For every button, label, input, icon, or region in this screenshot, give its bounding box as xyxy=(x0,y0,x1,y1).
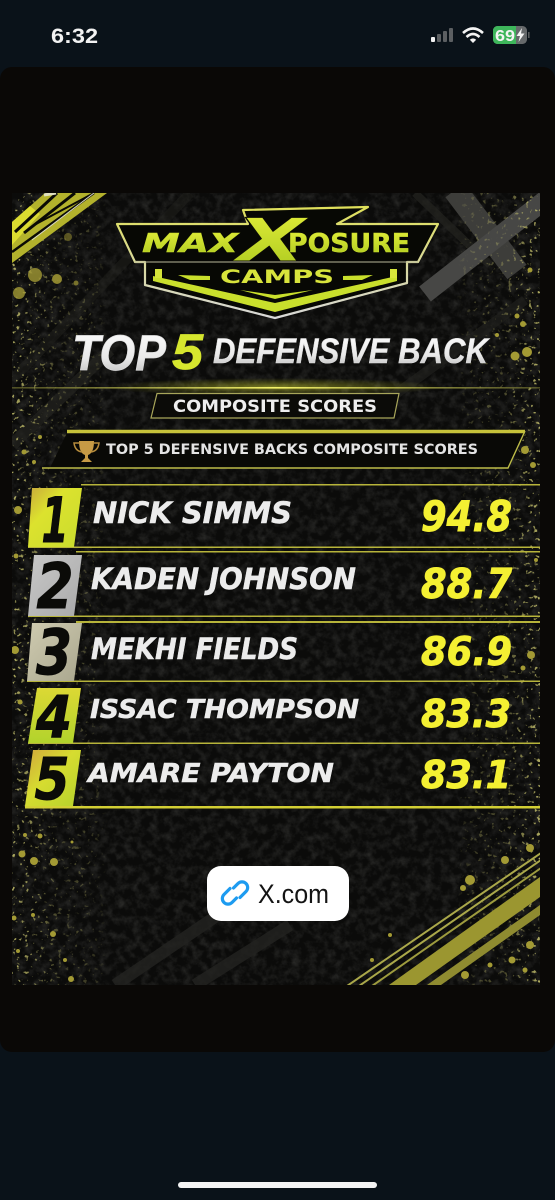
score: 83.3 xyxy=(421,692,511,736)
score: 88.7 xyxy=(421,560,512,608)
composite scores box: COMPOSITE SCORES xyxy=(173,397,377,417)
logo word MAX: MAX xyxy=(142,229,241,259)
row 5 xyxy=(25,750,508,806)
gold paint splatter xyxy=(11,193,540,985)
icon: battery 69 percent xyxy=(493,26,530,45)
link label: X.com xyxy=(258,879,329,909)
bottom-right corner stripes xyxy=(347,853,541,986)
banner text: TOP 5 DEFENSIVE BACKS COMPOSITE SCORES xyxy=(106,442,478,458)
rank badge 4 xyxy=(28,688,81,743)
score: 83.1 xyxy=(421,753,511,797)
rank badge 4: 4 xyxy=(35,683,72,751)
rank badge 5: 5 xyxy=(34,745,70,813)
logo shield xyxy=(117,207,438,318)
top-left corner stripes xyxy=(12,193,107,263)
icon: trophy xyxy=(74,441,99,462)
player name: ISSAC THOMPSON xyxy=(90,695,359,725)
icon: signal strength xyxy=(431,28,453,42)
glowing divider xyxy=(12,378,540,393)
rank badge 3 xyxy=(27,623,82,681)
title word TOP: TOP xyxy=(72,325,167,381)
logo word CAMPS: CAMPS xyxy=(220,266,334,288)
logo big X: X xyxy=(230,206,310,276)
rank badge 1 xyxy=(28,488,82,547)
row 2 xyxy=(28,555,512,616)
logo word POSURE: POSURE xyxy=(288,229,410,259)
score: 94.8 xyxy=(421,492,512,541)
player name: AMARE PAYTON xyxy=(86,759,334,789)
title numeral 5: 5 xyxy=(172,324,204,380)
big grey X watermark xyxy=(425,190,545,294)
rank badge 1: 1 xyxy=(42,484,68,557)
rank badge 2 xyxy=(28,555,82,616)
rule lines xyxy=(25,484,540,808)
logo: Max Xposure Camps xyxy=(117,206,438,318)
poster xyxy=(11,190,545,986)
rank badge 2: 2 xyxy=(36,550,74,623)
title words DEFENSIVE BACK: DEFENSIVE BACK xyxy=(213,332,490,371)
status bar xyxy=(51,25,530,48)
row 3 xyxy=(27,623,511,681)
banner: top 5 composite scores xyxy=(42,431,525,468)
clock: 6:32 xyxy=(51,25,98,48)
icon: link xyxy=(222,882,248,904)
composite scores box xyxy=(151,394,399,418)
player name: NICK SIMMS xyxy=(93,496,292,530)
icon: wifi xyxy=(463,28,483,43)
leaderboard xyxy=(25,484,540,813)
home indicator xyxy=(178,1182,377,1188)
row 4 xyxy=(28,688,510,743)
row 1 xyxy=(28,488,512,547)
link pill: X.com xyxy=(207,866,349,921)
background diagonal streaks xyxy=(12,193,525,985)
player name: KADEN JOHNSON xyxy=(91,562,356,596)
score: 86.9 xyxy=(421,630,512,675)
title xyxy=(74,334,490,371)
rank badge 3: 3 xyxy=(36,616,72,689)
icon: battery 69 percent: 69 xyxy=(495,28,515,45)
player name: MEKHI FIELDS xyxy=(91,632,298,666)
